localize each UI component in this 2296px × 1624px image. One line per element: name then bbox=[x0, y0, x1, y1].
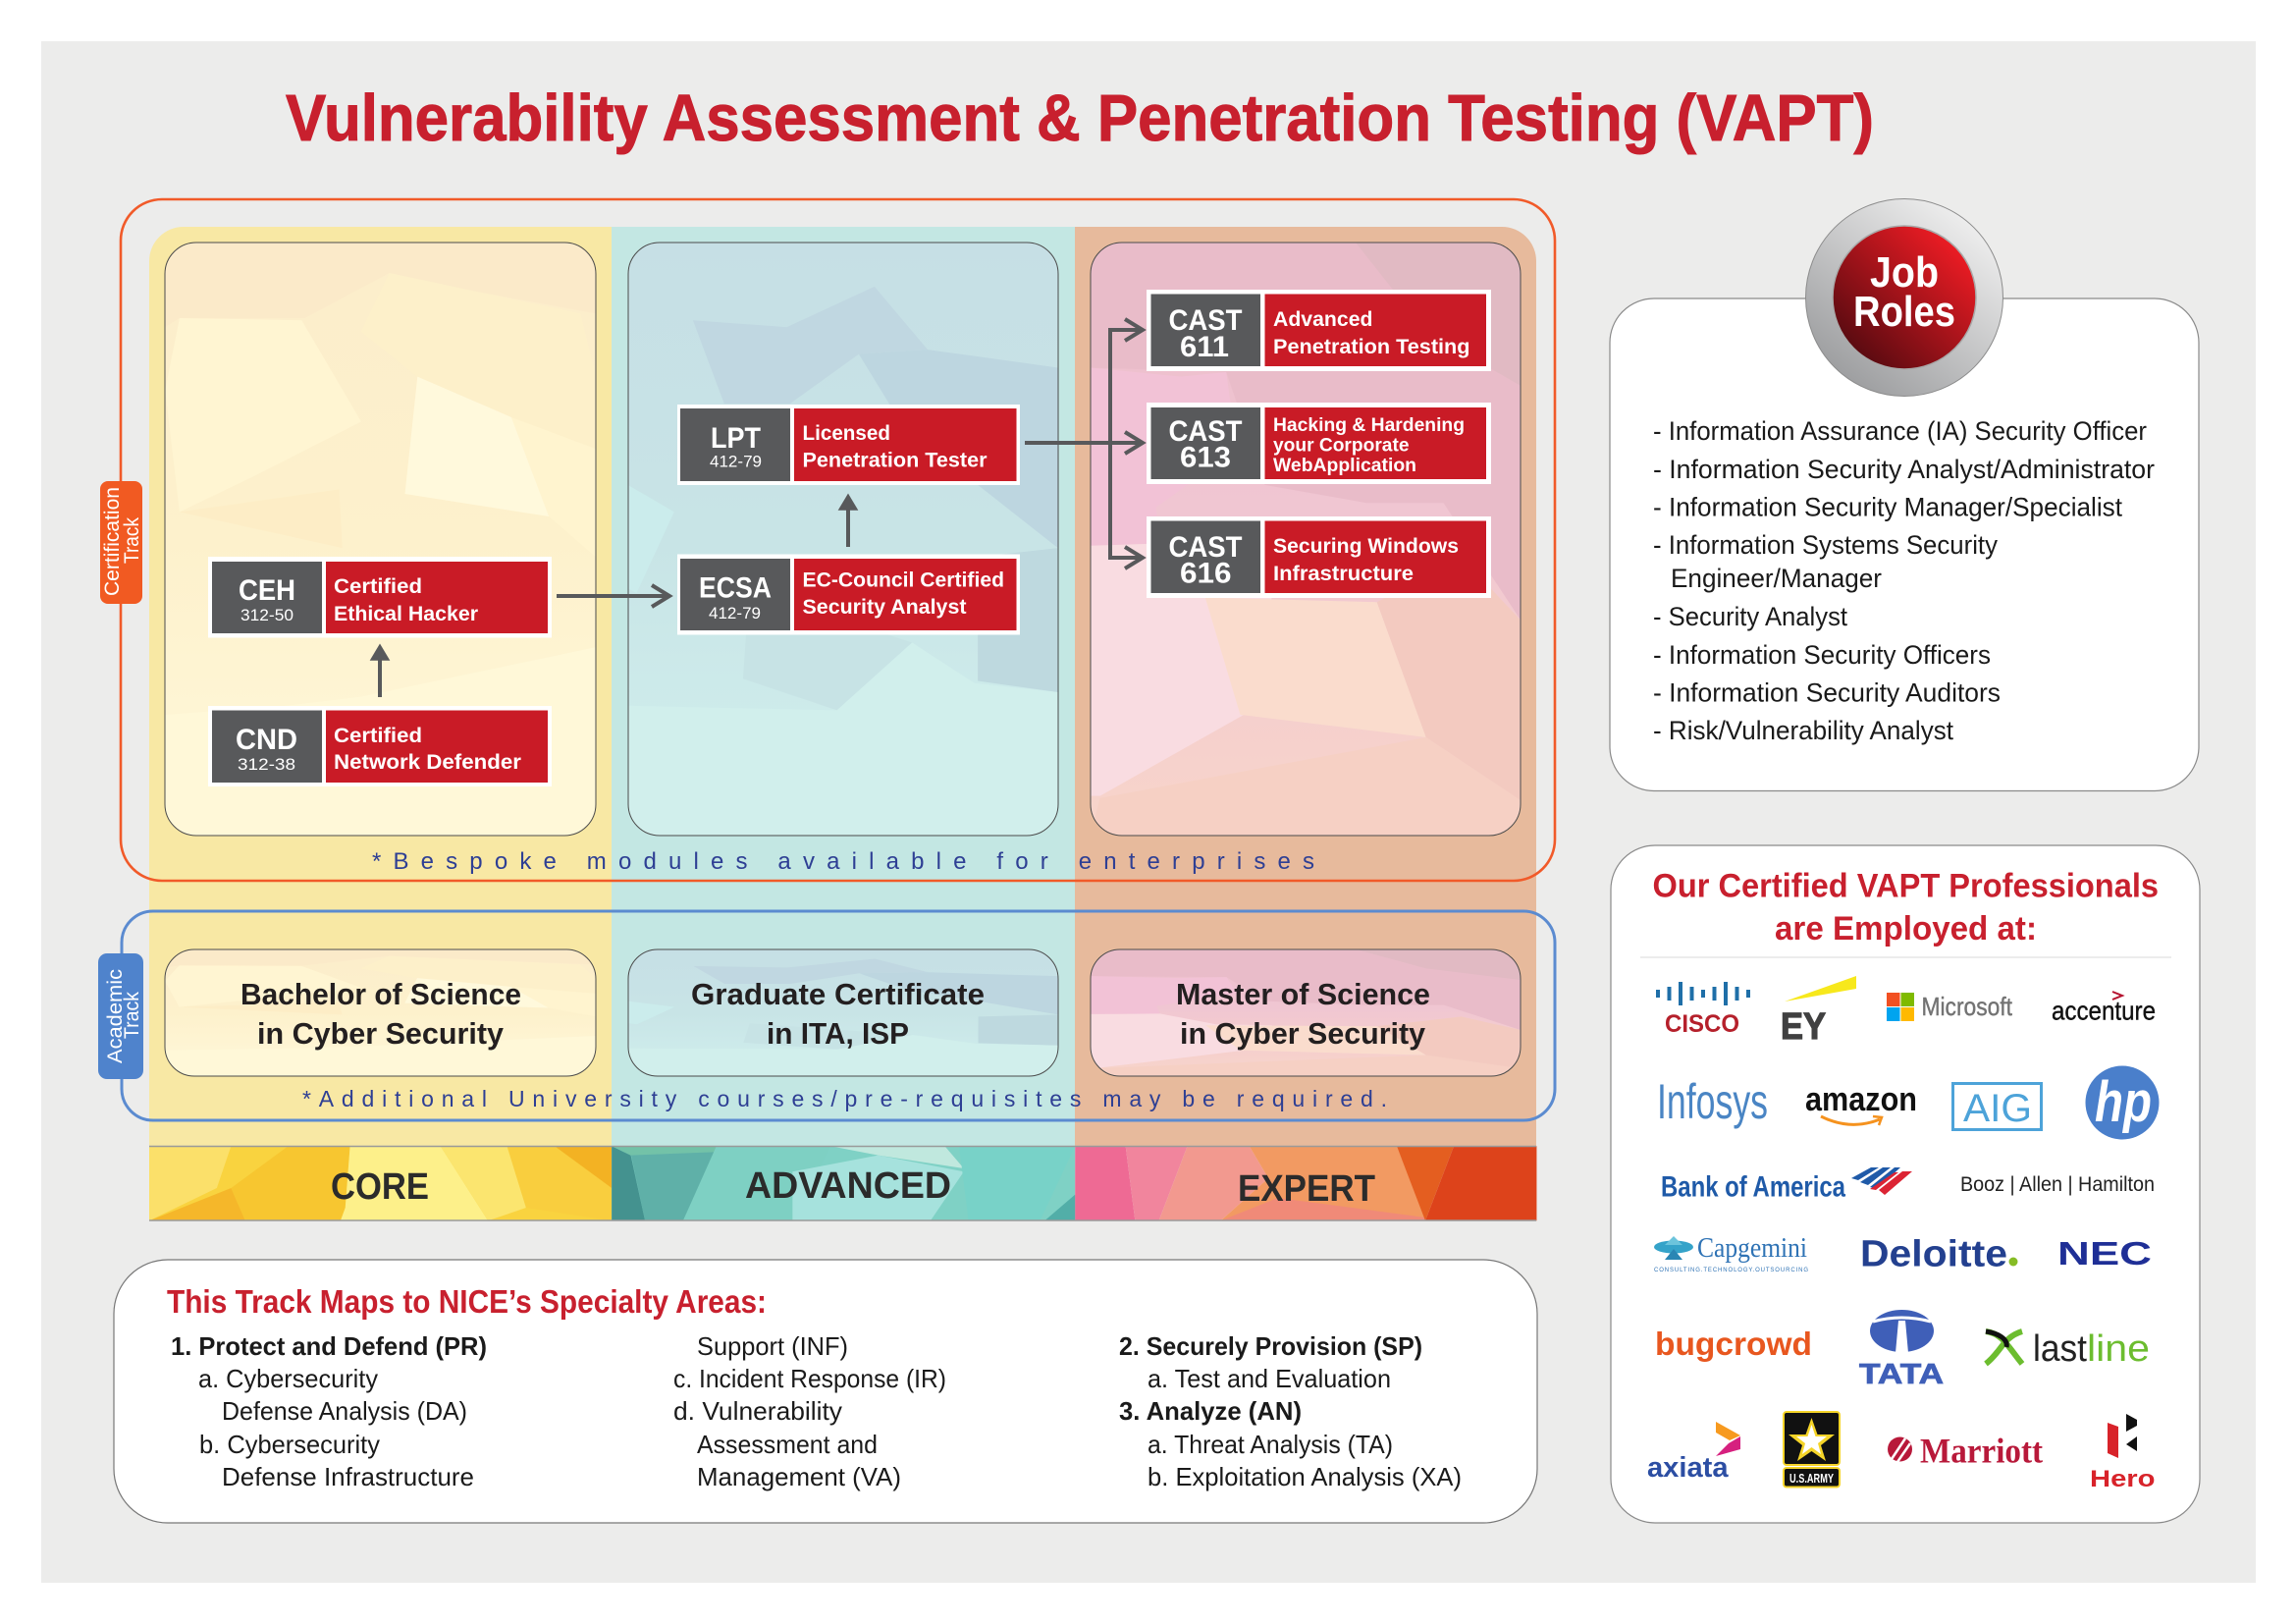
badge: CEH bbox=[208, 557, 552, 638]
logo: Hero: Hero bbox=[2090, 1466, 2156, 1492]
arrow: LPT to CAST branches bbox=[1025, 319, 1143, 568]
list: column 2: Support (INF) bbox=[697, 1331, 848, 1361]
logo: Cisco bbox=[1658, 982, 1748, 1038]
badge: CAST 616: Infrastructure bbox=[1273, 563, 1414, 585]
badge: CND bbox=[208, 706, 552, 786]
column backgrounds bbox=[149, 227, 1536, 1146]
list: column 1: Defense Infrastructure bbox=[222, 1462, 474, 1491]
badge: CAST 616: CAST bbox=[1168, 531, 1243, 564]
heading: employers: are Employed at: bbox=[1775, 910, 2037, 947]
badge: CAST 611: CAST bbox=[1168, 304, 1243, 337]
logo: Booz Allen Hamilton: Booz | Allen | Hamilton bbox=[1960, 1173, 2155, 1196]
logo: Capgemini: Capgemini bbox=[1697, 1233, 1807, 1264]
note: additional university courses: *Additional University courses/pre-requisites may be required. bbox=[302, 1086, 1387, 1111]
logo: Hero bbox=[2090, 1414, 2156, 1492]
badge: LPT: Penetration Tester bbox=[803, 450, 988, 471]
level bar: expert bbox=[1075, 1146, 1536, 1220]
certification track tab bbox=[100, 481, 143, 604]
badge: CAST 613: Hacking & Hardening bbox=[1273, 415, 1465, 436]
list: job roles: - Information Security Analyst/Administrator bbox=[1653, 455, 2155, 484]
badge: CEH: Certified bbox=[334, 575, 422, 598]
logo: Infosys: Infosys bbox=[1657, 1074, 1768, 1129]
logo: Capgemini: CONSULTING.TECHNOLOGY.OUTSOURCING bbox=[1654, 1268, 1808, 1273]
academic card: master: Master of Science bbox=[1176, 977, 1430, 1011]
list: column 2: c. Incident Response (IR) bbox=[673, 1364, 946, 1393]
logo: Deloitte: Deloitte bbox=[1860, 1233, 2007, 1274]
academic track tab: Track bbox=[121, 992, 143, 1039]
logo: Lastline bbox=[1986, 1328, 2150, 1370]
logo: Cisco: CISCO bbox=[1665, 1010, 1739, 1038]
logo: Accenture: accenture bbox=[2052, 996, 2156, 1025]
list: column 3 bbox=[1119, 1331, 1462, 1491]
level bar: expert: EXPERT bbox=[1238, 1168, 1375, 1210]
level bar edges bbox=[149, 1147, 1536, 1220]
panel: advanced certification card bbox=[628, 243, 1058, 836]
badge: CAST 613 bbox=[1147, 403, 1491, 484]
list: job roles: - Risk/Vulnerability Analyst bbox=[1653, 716, 1953, 745]
badge: LPT: LPT bbox=[711, 422, 761, 455]
badge: CAST 613: WebApplication bbox=[1273, 456, 1416, 476]
certification track tab: Track bbox=[121, 517, 143, 564]
arrow: CEH to ECSA bbox=[557, 585, 669, 607]
logo: Tata: TATA bbox=[1859, 1359, 1944, 1390]
badge: CND: Network Defender bbox=[334, 751, 521, 774]
academic card: master bbox=[1091, 949, 1521, 1076]
logo: Axiata bbox=[1647, 1422, 1740, 1484]
logo: US Army: U.S.ARMY bbox=[1789, 1471, 1834, 1486]
academic card: bachelor: in Cyber Security bbox=[257, 1016, 505, 1051]
logo: Axiata: axiata bbox=[1647, 1452, 1729, 1484]
list: job roles bbox=[1653, 416, 2155, 745]
logo: EY: EY bbox=[1781, 1006, 1826, 1048]
logo: Tata bbox=[1859, 1310, 1944, 1390]
title: Vulnerability Assessment & Penetration Testing (VAPT) bbox=[286, 81, 1874, 155]
level bar: advanced bbox=[612, 1146, 1075, 1220]
arrow: ECSA to LPT bbox=[839, 495, 857, 547]
logo: Bank of America: Bank of America bbox=[1661, 1170, 1845, 1204]
academic track tab bbox=[98, 953, 143, 1079]
arrow: CND to CEH bbox=[371, 645, 389, 697]
badge: CAST 616: 616 bbox=[1180, 558, 1231, 589]
logo: US Army bbox=[1784, 1412, 1840, 1487]
badge: ECSA bbox=[677, 554, 1020, 634]
list: column 3: 3. Analyze (AN) bbox=[1119, 1396, 1302, 1426]
list: column 3: a. Test and Evaluation bbox=[1148, 1364, 1391, 1393]
list: job roles: Engineer/Manager bbox=[1671, 564, 1882, 593]
badge: ECSA: ECSA bbox=[699, 571, 772, 605]
badge: CAST 616: Securing Windows bbox=[1273, 535, 1459, 558]
panel: core certification card bbox=[165, 243, 596, 836]
panel: expert certification card bbox=[1091, 243, 1521, 836]
list: job roles: - Security Analyst bbox=[1653, 602, 1847, 631]
list: column 2: d. Vulnerability bbox=[673, 1396, 842, 1426]
list: job roles: - Information Security Manager/Specialist bbox=[1653, 493, 2122, 522]
logo: Marriott: Marriott bbox=[1920, 1432, 2043, 1471]
list: job roles: - Information Systems Security bbox=[1653, 530, 1998, 560]
list: column 3: b. Exploitation Analysis (XA) bbox=[1148, 1462, 1462, 1491]
certification track tab: Certification bbox=[101, 487, 124, 596]
badge: CAST 611: 611 bbox=[1180, 331, 1229, 363]
level bar: advanced: ADVANCED bbox=[745, 1165, 951, 1207]
badge: CAST 611: Penetration Testing bbox=[1273, 336, 1470, 358]
badge: CND: CND bbox=[236, 724, 297, 756]
academic track outline bbox=[122, 911, 1555, 1120]
list: job roles: - Information Security Auditors bbox=[1653, 677, 2001, 707]
heading: NICE: This Track Maps to NICE’s Specialty Areas: bbox=[167, 1283, 767, 1320]
panel: employers bbox=[1611, 845, 2200, 1523]
badge: job roles: Job bbox=[1870, 248, 1939, 297]
logo: EY bbox=[1781, 976, 1856, 1048]
level bar: core bbox=[149, 1146, 612, 1220]
badge: CAST 611: Advanced bbox=[1273, 308, 1372, 331]
badge: ECSA: Security Analyst bbox=[803, 596, 966, 619]
academic track tab: Academic bbox=[104, 969, 127, 1063]
academic card: graduate certificate: Graduate Certificate bbox=[691, 977, 985, 1011]
badge: LPT: 412-79 bbox=[710, 452, 762, 471]
list: column 1: 1. Protect and Defend (PR) bbox=[171, 1331, 487, 1361]
logo: Lastline: last bbox=[2033, 1328, 2087, 1370]
badge: CEH: 312-50 bbox=[240, 606, 294, 624]
logo: NEC: NEC bbox=[2057, 1235, 2152, 1272]
badge: CND: 312-38 bbox=[238, 755, 295, 774]
badge: CAST 613: your Corporate bbox=[1273, 436, 1410, 456]
badge: CEH: Ethical Hacker bbox=[334, 603, 478, 625]
panel: job roles bbox=[1610, 298, 2199, 791]
logo: Amazon: amazon bbox=[1805, 1081, 1917, 1118]
heading: employers: Our Certified VAPT Professionals bbox=[1653, 868, 2159, 905]
logo: Capgemini bbox=[1654, 1233, 1808, 1273]
badge: CEH: CEH bbox=[239, 574, 295, 607]
list: column 3: 2. Securely Provision (SP) bbox=[1119, 1331, 1422, 1361]
level bar: core: CORE bbox=[331, 1166, 429, 1208]
badge: LPT bbox=[677, 405, 1020, 485]
logo: Bugcrowd: bugcrowd bbox=[1655, 1326, 1812, 1362]
badge: CAST 613: 613 bbox=[1180, 442, 1231, 473]
list: column 1: b. Cybersecurity bbox=[199, 1430, 380, 1459]
logo: Microsoft bbox=[1887, 992, 2013, 1021]
heading: employers bbox=[1653, 868, 2159, 947]
academic card: bachelor: Bachelor of Science bbox=[240, 977, 521, 1011]
academic card: graduate certificate: in ITA, ISP bbox=[767, 1016, 909, 1051]
badge: ECSA: EC-Council Certified bbox=[803, 569, 1004, 591]
logo: Microsoft: Microsoft bbox=[1922, 992, 2013, 1021]
academic card: bachelor bbox=[165, 949, 596, 1076]
logo: AIG: AIG bbox=[1963, 1087, 2032, 1130]
logo: Lastline: line bbox=[2087, 1328, 2150, 1370]
badge: CND: Certified bbox=[334, 725, 422, 747]
list: column 2: Assessment and bbox=[697, 1430, 878, 1459]
academic card: graduate certificate bbox=[628, 949, 1059, 1076]
list: column 2 bbox=[673, 1331, 946, 1491]
logo: HP: hp bbox=[2095, 1070, 2152, 1134]
list: job roles: - Information Assurance (IA) Security Officer bbox=[1653, 416, 2147, 446]
badge: CAST 613: CAST bbox=[1168, 415, 1243, 448]
list: column 1: a. Cybersecurity bbox=[198, 1364, 378, 1393]
list: job roles: - Information Security Officers bbox=[1653, 640, 1991, 670]
badge: job roles bbox=[1806, 198, 2002, 397]
list: column 1 bbox=[171, 1331, 487, 1491]
panel: NICE specialty areas bbox=[114, 1260, 1537, 1523]
note: bespoke modules: *Bespoke modules available for enterprises bbox=[372, 848, 1314, 875]
badge: job roles: Roles bbox=[1853, 288, 1955, 336]
list: column 3: a. Threat Analysis (TA) bbox=[1148, 1430, 1393, 1459]
list: column 2: Management (VA) bbox=[697, 1462, 901, 1491]
list: column 1: Defense Analysis (DA) bbox=[222, 1396, 467, 1426]
badge: CAST 616 bbox=[1147, 516, 1491, 598]
badge: LPT: Licensed bbox=[803, 422, 890, 445]
academic card: master: in Cyber Security bbox=[1180, 1016, 1426, 1051]
badge: CAST 611 bbox=[1147, 290, 1491, 371]
badge: ECSA: 412-79 bbox=[709, 604, 761, 623]
certification track outline bbox=[121, 199, 1555, 881]
